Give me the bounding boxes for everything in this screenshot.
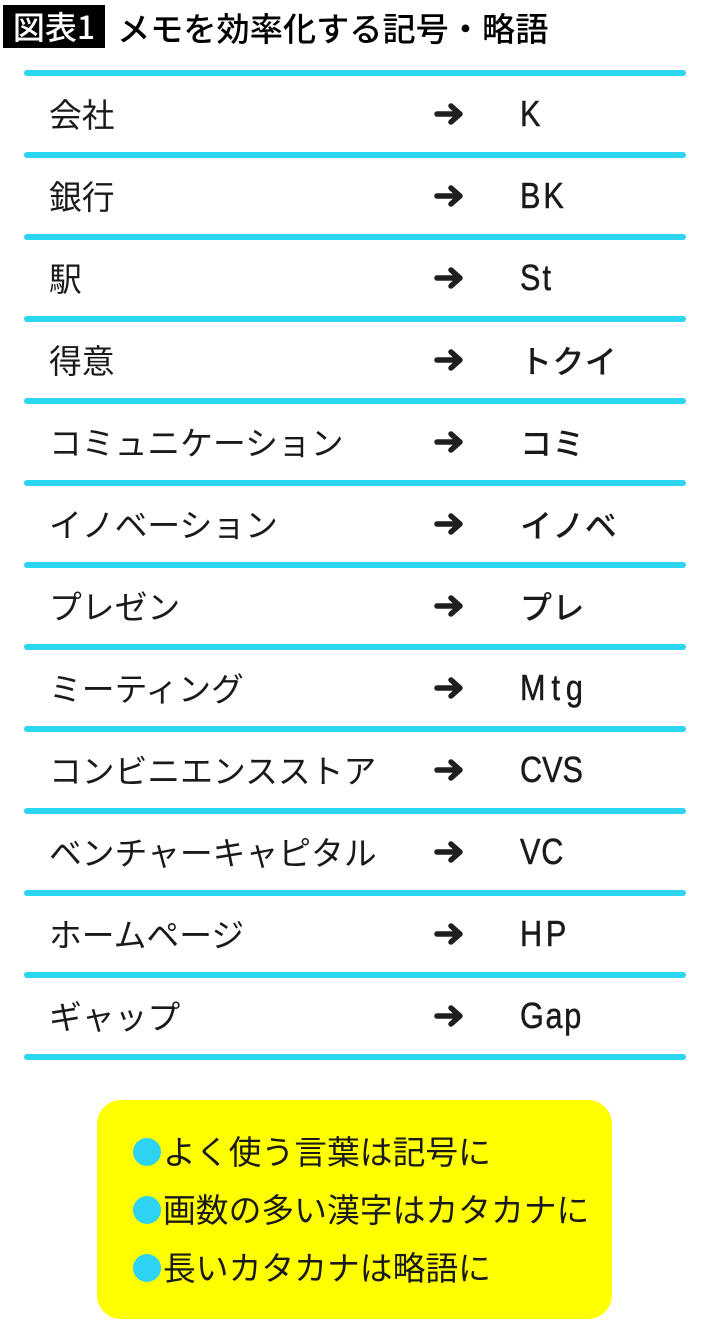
row: イノベーション to イノベ: イノベ	[520, 501, 617, 547]
row: ミーティング to Mtg	[49, 664, 589, 711]
row: ホームページ to HP	[49, 910, 570, 957]
row: ホームページ to HP: HP	[520, 913, 570, 954]
row: イノベーション to イノベ: イノベーション	[49, 500, 278, 547]
row: ベンチャーキャピタル to VC: VC	[520, 831, 564, 872]
row: ギャップ to Gap: Gap	[520, 995, 583, 1036]
row: ベンチャーキャピタル to VC: ベンチャーキャピタル	[49, 828, 377, 875]
row: 駅 to St: 駅	[49, 254, 82, 301]
figure label badge: 図表1	[13, 3, 95, 49]
title	[3, 2, 548, 51]
row: コミュニケーション to コミ: コミュニケーション	[49, 418, 344, 465]
row: コンビニエンスストア to CVS	[49, 746, 583, 793]
row: 銀行 to BK: BK	[520, 175, 567, 216]
row: ギャップ to Gap	[49, 992, 583, 1039]
row: 得意 to トクイ	[49, 336, 617, 383]
row: プレゼン to プレ	[49, 582, 585, 629]
row: イノベーション to イノベ	[49, 500, 617, 547]
text: complex kanji: 画数の多い漢字はカタカナに	[163, 1185, 589, 1232]
row: コンビニエンスストア to CVS: コンビニエンスストア	[49, 746, 376, 793]
row: ホームページ to HP: ホームページ	[49, 910, 244, 957]
bullet icon 1	[133, 1138, 161, 1166]
row: 会社 to K: K	[520, 93, 540, 134]
row: ギャップ to Gap: ギャップ	[49, 992, 180, 1039]
text: long katakana: 長いカタカナは略語に	[163, 1243, 491, 1290]
row: 得意 to トクイ: 得意	[49, 336, 115, 383]
row: 銀行 to BK	[49, 172, 567, 219]
bullet icon 3	[133, 1254, 161, 1282]
heading text: メモを効率化する記号・略語	[117, 2, 548, 51]
row: プレゼン to プレ: プレゼン	[49, 582, 180, 629]
row: 銀行 to BK: 銀行	[49, 172, 115, 219]
row: コミュニケーション to コミ	[49, 418, 585, 465]
panel: summary callout	[97, 1100, 612, 1319]
row: プレゼン to プレ: プレ	[520, 583, 585, 629]
row: 駅 to St	[49, 254, 553, 301]
row: ミーティング to Mtg: Mtg	[520, 667, 589, 708]
row: 得意 to トクイ: トクイ	[520, 337, 617, 383]
row: 会社 to K: 会社	[49, 90, 115, 137]
row: ベンチャーキャピタル to VC	[49, 828, 564, 875]
row: ミーティング to Mtg: ミーティング	[49, 664, 244, 711]
row: コミュニケーション to コミ: コミ	[520, 419, 585, 465]
bullet icon 2	[133, 1196, 161, 1224]
text: frequent words: よく使う言葉は記号に	[163, 1127, 491, 1174]
row: コンビニエンスストア to CVS: CVS	[520, 749, 583, 790]
row: 会社 to K	[49, 90, 540, 137]
row: 駅 to St: St	[520, 257, 553, 298]
